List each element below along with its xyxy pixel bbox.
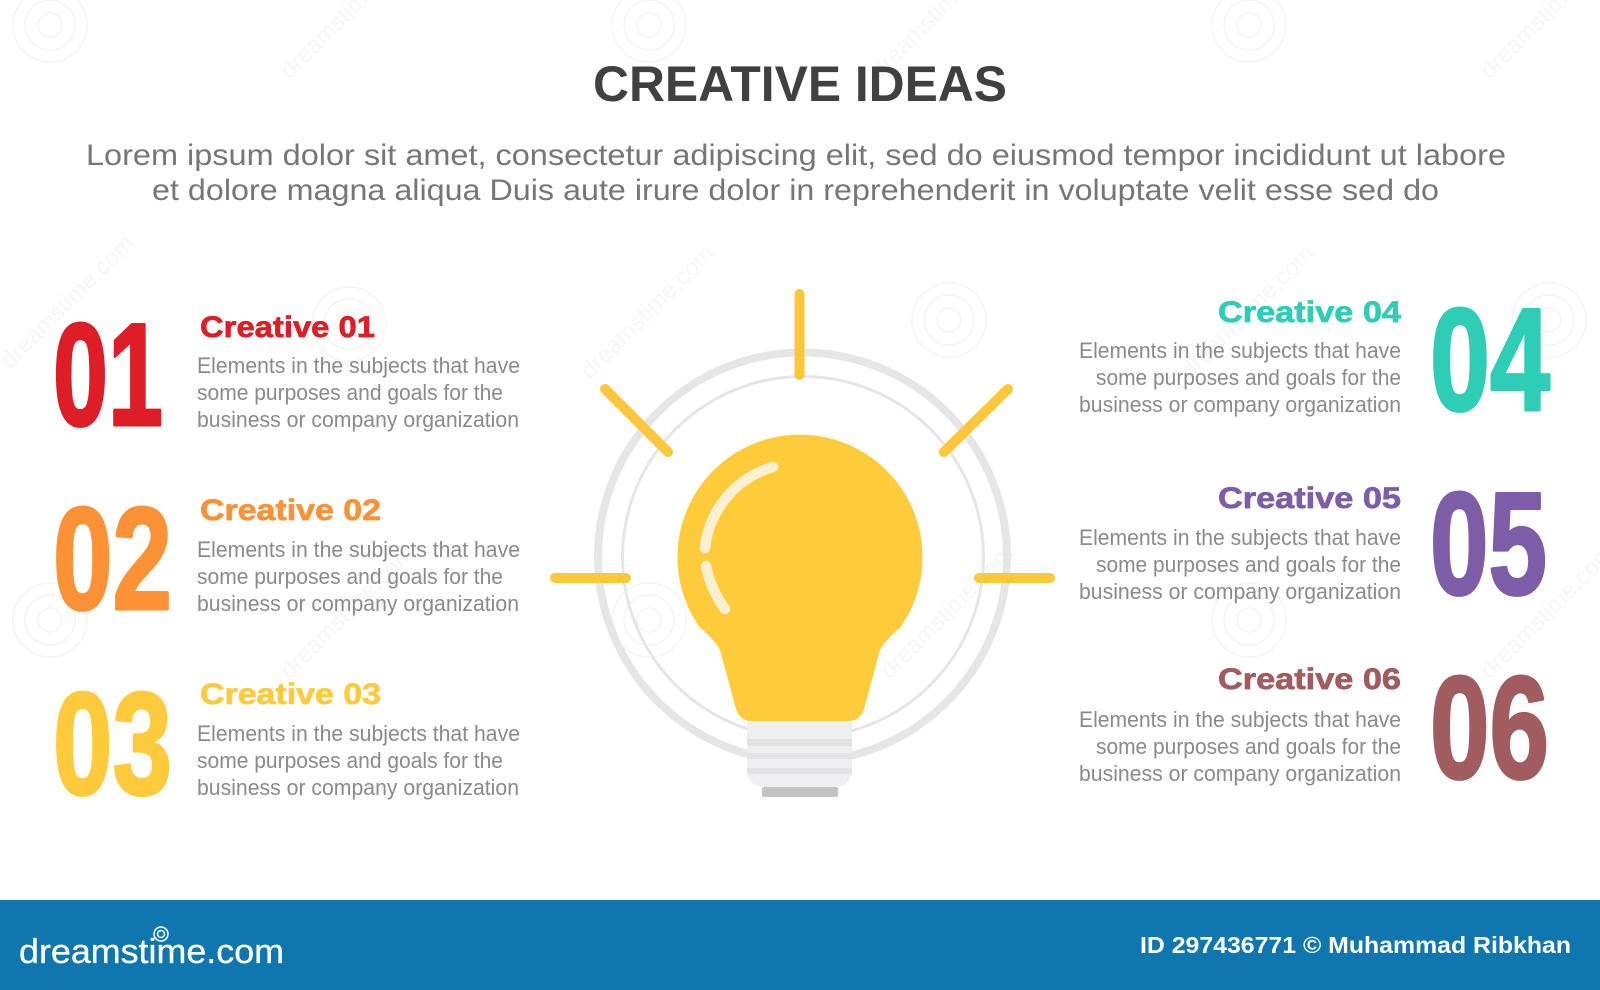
text: dreamstime.com [875, 540, 1020, 684]
screw base [747, 712, 852, 797]
footer band [0, 900, 1600, 990]
description 01: some purposes and goals for the [197, 380, 503, 405]
number 04: 04 [1430, 278, 1550, 441]
glass highlights [705, 467, 773, 609]
number 02: 02 [53, 477, 172, 640]
icon: light bulb with rings and rays [555, 294, 1050, 797]
item 05 [1079, 462, 1547, 625]
description 03: business or company organization [197, 775, 519, 800]
heading: Creative 02: Creative 02 [200, 494, 381, 527]
title: CREATIVE IDEAS [593, 56, 1007, 112]
description 04: Elements in the subjects that have [1079, 338, 1401, 363]
heading: Creative 04: Creative 04 [1218, 296, 1401, 329]
heading: Creative 01: Creative 01 [200, 311, 375, 344]
description 06: some purposes and goals for the [1096, 734, 1401, 759]
heading: Creative 05: Creative 05 [1218, 482, 1401, 515]
image credit: ID 297436771 © Muhammad Ribkhan [1140, 932, 1571, 958]
description 02: Elements in the subjects that have [197, 537, 520, 562]
description 06 [1079, 707, 1401, 786]
description 04: some purposes and goals for the [1096, 365, 1401, 390]
text: dreamstime.com [575, 240, 720, 384]
item 01 [53, 293, 520, 456]
logo: dreamstime.com: dreamstime.com [19, 933, 284, 971]
description 04: business or company organization [1079, 392, 1401, 417]
text: dreamstime.com [1175, 240, 1320, 384]
bulb glass [678, 435, 922, 721]
description 04 [1079, 338, 1401, 417]
light rays [555, 294, 1050, 578]
description 02: business or company organization [197, 591, 519, 616]
description 05: Elements in the subjects that have [1079, 525, 1401, 550]
description 03: some purposes and goals for the [197, 748, 503, 773]
item 02 [53, 477, 520, 640]
subtitle text: Lorem ipsum dolor sit amet, consectetur adipiscing elit, sed do eiusmod tempor incididunt ut labore [86, 139, 1506, 172]
description 02 [197, 537, 520, 616]
glow rings [598, 352, 1007, 762]
description 01 [197, 353, 520, 432]
item 04 [1079, 278, 1550, 441]
number 01: 01 [53, 293, 163, 456]
subtitle text: et dolore magna aliqua Duis aute irure dolor in reprehenderit in voluptate velit esse sed do [152, 174, 1439, 207]
description 03 [197, 721, 520, 800]
number 05: 05 [1430, 462, 1547, 625]
icon: logo spiral [154, 927, 168, 941]
description 01: business or company organization [197, 407, 519, 432]
heading: Creative 03: Creative 03 [200, 678, 381, 711]
description 05: some purposes and goals for the [1096, 552, 1401, 577]
description 02: some purposes and goals for the [197, 564, 503, 589]
item 03 [53, 662, 520, 825]
description 03: Elements in the subjects that have [197, 721, 520, 746]
description 05 [1079, 525, 1401, 604]
description 01: Elements in the subjects that have [197, 353, 520, 378]
subtitle text [86, 139, 1506, 207]
number 06: 06 [1430, 646, 1549, 809]
description 06: Elements in the subjects that have [1079, 707, 1401, 732]
text: dreamstime.com [275, 540, 420, 684]
description 06: business or company organization [1079, 761, 1401, 786]
description 05: business or company organization [1079, 579, 1401, 604]
heading: Creative 06: Creative 06 [1218, 663, 1401, 696]
number 03: 03 [53, 662, 172, 825]
item 06 [1079, 646, 1549, 809]
